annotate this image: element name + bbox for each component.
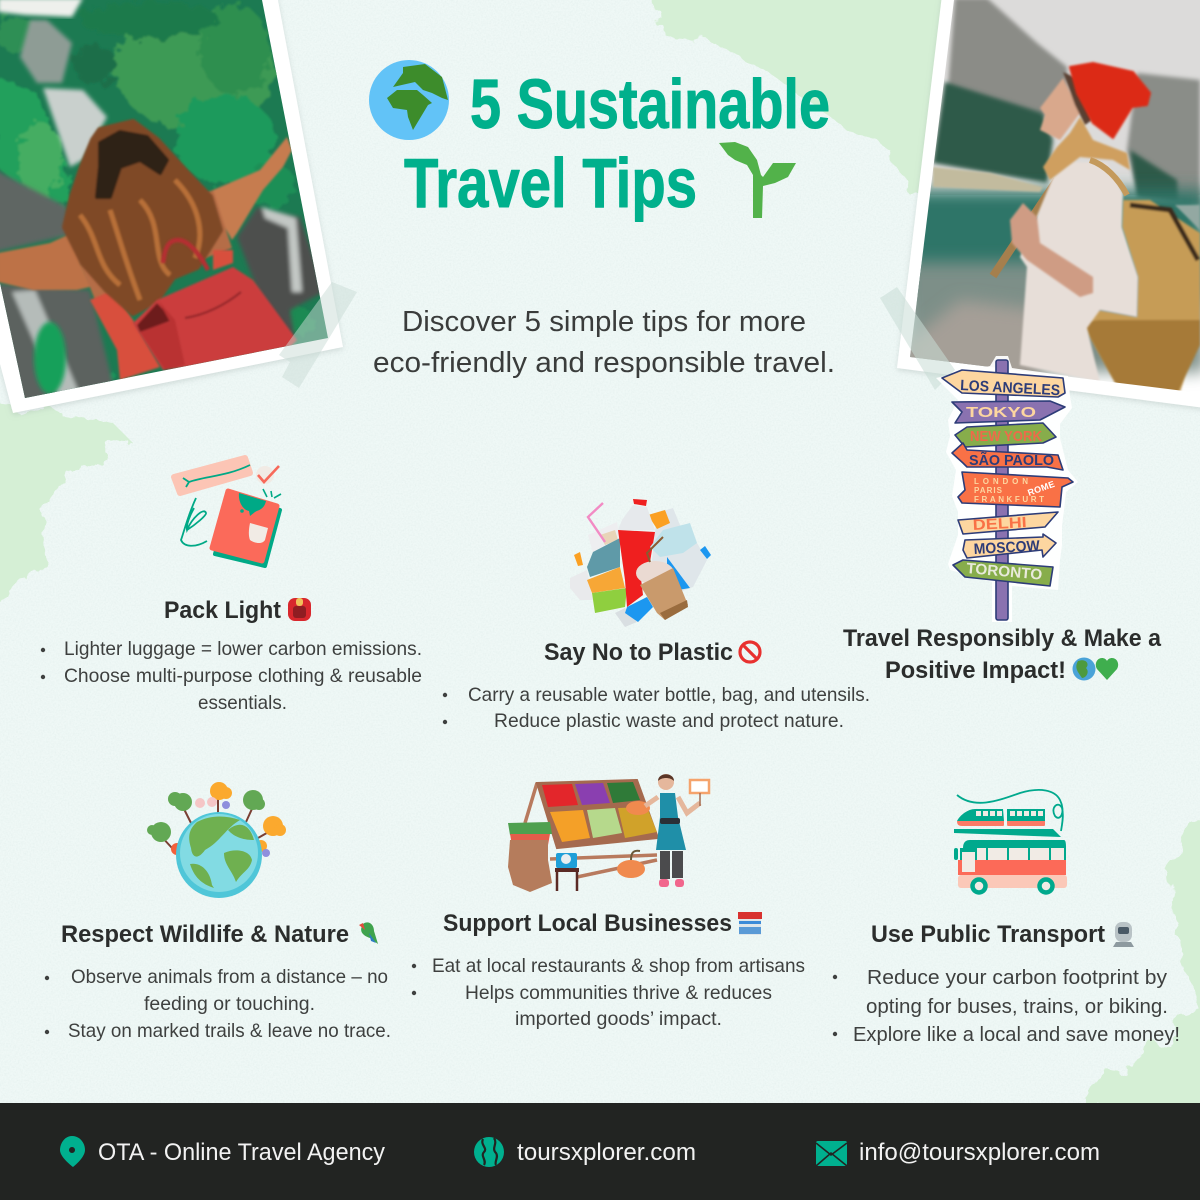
icon: earth globe xyxy=(369,60,449,140)
heading line 2: Positive Impact! xyxy=(885,657,1066,684)
sign: London Paris Frankfurt Rome: ROME xyxy=(1026,479,1056,498)
icon: train and bus xyxy=(954,790,1067,892)
bullet list: opting for buses, trains, or biking. xyxy=(866,995,1168,1018)
icon: parrot emoji xyxy=(359,922,378,944)
red beanie xyxy=(1070,63,1150,138)
heading: Use Public Transport xyxy=(871,921,1105,948)
subtitle xyxy=(373,306,835,379)
tan backpack xyxy=(1086,198,1200,391)
icon: green heart xyxy=(1096,658,1118,680)
heading: Support Local Businesses xyxy=(443,910,732,937)
bullet list: imported goods’ impact. xyxy=(515,1008,722,1030)
sign: Tokyo xyxy=(952,401,1065,423)
icon: earth with trees xyxy=(147,782,286,898)
footer bar xyxy=(0,1103,1200,1200)
bullet list: essentials. xyxy=(198,692,287,714)
sign: New York: NEW YORK xyxy=(970,428,1042,445)
icon: monorail emoji xyxy=(1113,922,1134,947)
hair xyxy=(65,122,220,313)
panel: use public transport xyxy=(833,790,1180,1046)
subtitle: Discover 5 simple tips for more xyxy=(402,306,806,338)
icon: shirt and scale xyxy=(174,458,281,566)
panel: travel responsibly xyxy=(843,625,1162,684)
icon: market stall with vendor xyxy=(508,774,709,892)
bullet list xyxy=(412,955,805,1030)
panel: respect wildlife xyxy=(45,782,391,1042)
contact: website: toursxplorer.com xyxy=(517,1139,696,1166)
icon: backpack emoji xyxy=(288,598,311,621)
sign: Los Angeles xyxy=(942,370,1065,399)
bullet list: Explore like a local and save money! xyxy=(853,1023,1180,1046)
red backpack xyxy=(133,240,297,370)
bullet list: Eat at local restaurants & shop from artisans xyxy=(432,955,805,977)
sign: Moscow: MOSCOW xyxy=(973,538,1041,558)
hair and face xyxy=(1040,72,1130,180)
bullet list: Reduce your carbon footprint by xyxy=(867,966,1168,989)
bullet list xyxy=(45,966,391,1042)
bullet list: feeding or touching. xyxy=(144,993,315,1015)
subtitle: eco-friendly and responsible travel. xyxy=(373,347,835,379)
sign: Toronto xyxy=(953,560,1053,586)
heading: Say No to Plastic xyxy=(544,639,733,666)
waterfall xyxy=(0,20,322,402)
sign: Sao Paolo: SÃO PAOLO xyxy=(969,451,1054,469)
heading: Pack Light xyxy=(164,597,281,624)
bullet list: Carry a reusable water bottle, bag, and utensils. xyxy=(468,684,870,706)
icon: plastic waste pile xyxy=(570,499,711,627)
bullet list: Reduce plastic waste and protect nature. xyxy=(494,710,844,732)
title xyxy=(369,60,830,222)
icon: prohibited sign xyxy=(740,642,760,662)
sign: London Paris Frankfurt Rome xyxy=(958,472,1073,507)
sign: London Paris Frankfurt Rome: PARIS xyxy=(974,486,1003,495)
sign: Sao Paolo xyxy=(952,443,1063,470)
bullet list: Choose multi-purpose clothing & reusable xyxy=(64,665,422,687)
arm and hand xyxy=(1010,203,1093,297)
sign: London Paris Frankfurt Rome: FRANKFURT xyxy=(974,495,1044,504)
illustration: city signpost xyxy=(936,356,1078,622)
sign: Tokyo: TOKYO xyxy=(966,404,1036,421)
contact: agency: OTA - Online Travel Agency xyxy=(98,1139,385,1166)
sign: Delhi xyxy=(958,512,1058,534)
panel: say no to plastic xyxy=(443,499,870,732)
bullet list: Helps communities thrive & reduces xyxy=(465,982,772,1004)
sign: Toronto: TORONTO xyxy=(966,560,1043,584)
foliage xyxy=(0,2,313,396)
dress xyxy=(90,250,233,380)
icon: globe xyxy=(474,1137,504,1167)
woman's arms xyxy=(0,137,292,300)
panel: pack light xyxy=(41,458,422,714)
heading line 1: Travel Responsibly & Make a xyxy=(843,625,1162,652)
photo: woman at lake xyxy=(897,0,1200,408)
bullet list xyxy=(833,966,1180,1046)
panel: support local businesses xyxy=(412,774,805,1030)
bullet list xyxy=(41,638,422,714)
icon: sprout xyxy=(719,142,796,218)
sign: London Paris Frankfurt Rome: LONDON xyxy=(974,477,1028,486)
icon: envelope xyxy=(816,1141,847,1166)
sign: Moscow xyxy=(963,534,1056,558)
sign: Los Angeles: LOS ANGELES xyxy=(960,377,1061,399)
title line 1: 5 Sustainable xyxy=(470,65,830,143)
photo: woman at waterfall xyxy=(0,0,343,415)
icon: convenience store emoji xyxy=(738,912,762,935)
sign: New York xyxy=(955,423,1056,447)
bullet list: Lighter luggage = lower carbon emissions. xyxy=(64,638,422,660)
contact: email: info@toursxplorer.com xyxy=(859,1139,1100,1166)
tape on left photo xyxy=(279,282,357,388)
title line 2: Travel Tips xyxy=(404,144,697,222)
bullet list: Observe animals from a distance – no xyxy=(71,966,388,988)
icon: globe emoji xyxy=(1072,658,1096,680)
heading: Respect Wildlife & Nature xyxy=(61,921,349,948)
bullet list: Stay on marked trails & leave no trace. xyxy=(68,1020,391,1042)
icon: map pin xyxy=(60,1136,85,1167)
sign: Delhi: DELHI xyxy=(972,514,1027,534)
woman's sweater xyxy=(1020,162,1138,382)
strap xyxy=(993,180,1057,276)
bullet list xyxy=(443,684,870,732)
tape on right photo xyxy=(880,287,955,390)
